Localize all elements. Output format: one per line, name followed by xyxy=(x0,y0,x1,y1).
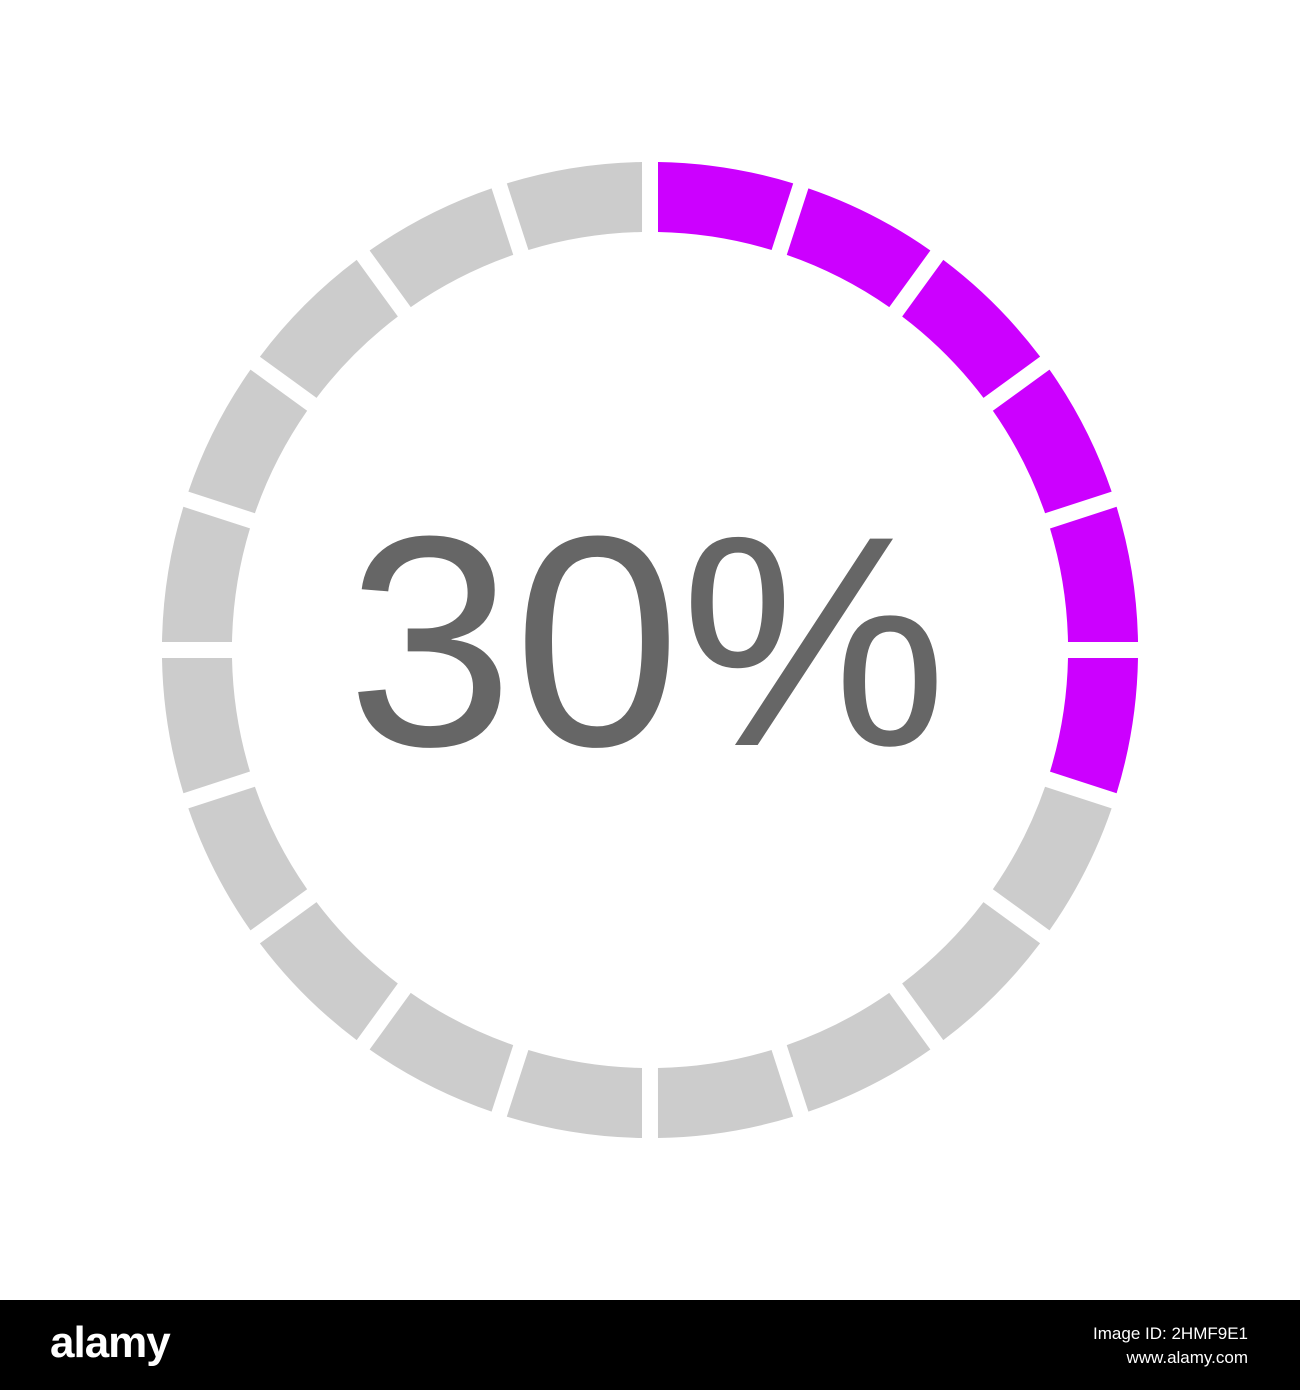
footer bar xyxy=(0,1300,1300,1390)
logo: alamy: alamy xyxy=(50,1318,170,1367)
image id text: www.alamy.com xyxy=(1126,1348,1248,1367)
image id text xyxy=(1093,1324,1248,1367)
image id text: Image ID: 2HMF9E1 xyxy=(1093,1324,1248,1343)
remaining segments (grey) xyxy=(142,142,1112,1158)
progress segments (purple, 30%) xyxy=(658,162,1158,793)
percentage label: 30% xyxy=(347,473,947,809)
